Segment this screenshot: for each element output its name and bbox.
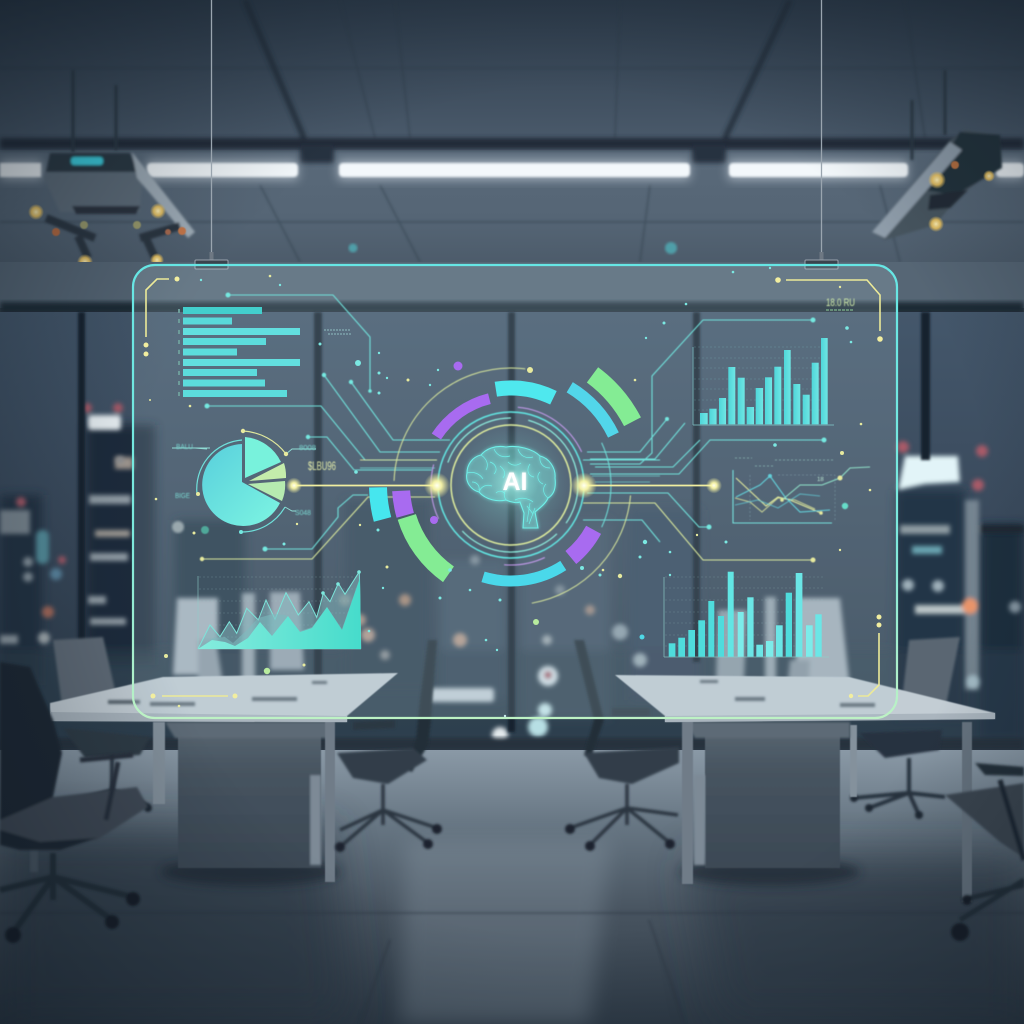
AI label: AI [502, 468, 528, 496]
pie labels [175, 444, 316, 517]
city bokeh centre [116, 456, 647, 743]
back right chair [850, 637, 960, 819]
floor [0, 750, 1024, 1024]
circuit lines left [200, 292, 450, 561]
pie labels: BIGE [175, 493, 190, 500]
left endpoint dots [200, 292, 372, 561]
ceiling projector right [872, 70, 1002, 240]
hanging cables and clips [195, 0, 838, 269]
floating particles [149, 242, 871, 717]
ceiling projector left [28, 70, 195, 270]
centre left chair [335, 640, 442, 852]
corner brackets [144, 276, 883, 698]
foreground right chair [945, 763, 1024, 941]
top caption lines [324, 330, 351, 334]
icon: brain [467, 446, 555, 528]
ceiling light strips [0, 160, 1024, 180]
right desk [615, 675, 995, 902]
line chart label: 18 [817, 477, 824, 483]
centre right chair [565, 640, 679, 851]
pie chart: $LBU96 [308, 459, 336, 473]
right endpoint dots [665, 318, 826, 562]
pie labels: BALU [176, 444, 193, 451]
left monitors [173, 592, 304, 690]
back wall and beam [0, 262, 1024, 314]
back left chair [53, 637, 152, 812]
bottom right bar chart [664, 572, 829, 657]
top right bar chart [693, 338, 834, 425]
central AI hub [319, 293, 703, 677]
thick coloured ring segments [319, 293, 703, 677]
pie chart [172, 429, 336, 534]
pie labels: 8008 [299, 445, 316, 452]
city lights right [897, 441, 1024, 690]
corner label: 18.0 RU [826, 297, 855, 309]
corner label [826, 297, 855, 310]
ceiling [0, 0, 1024, 265]
windows and city [0, 312, 1024, 750]
left desk [30, 673, 398, 886]
main connector beams and nodes [286, 472, 722, 498]
circuit lines right [583, 318, 826, 562]
line chart [733, 458, 870, 523]
top left bar chart [178, 307, 300, 397]
pie labels: S048 [295, 510, 311, 517]
glass panel [133, 265, 897, 718]
city lights left [0, 403, 133, 644]
AI glow [491, 457, 539, 505]
pie outer rings [172, 431, 316, 532]
right monitors [716, 597, 850, 700]
foreground left chair [0, 662, 148, 943]
thin hub rings [378, 352, 644, 618]
bottom left area chart [198, 570, 361, 649]
